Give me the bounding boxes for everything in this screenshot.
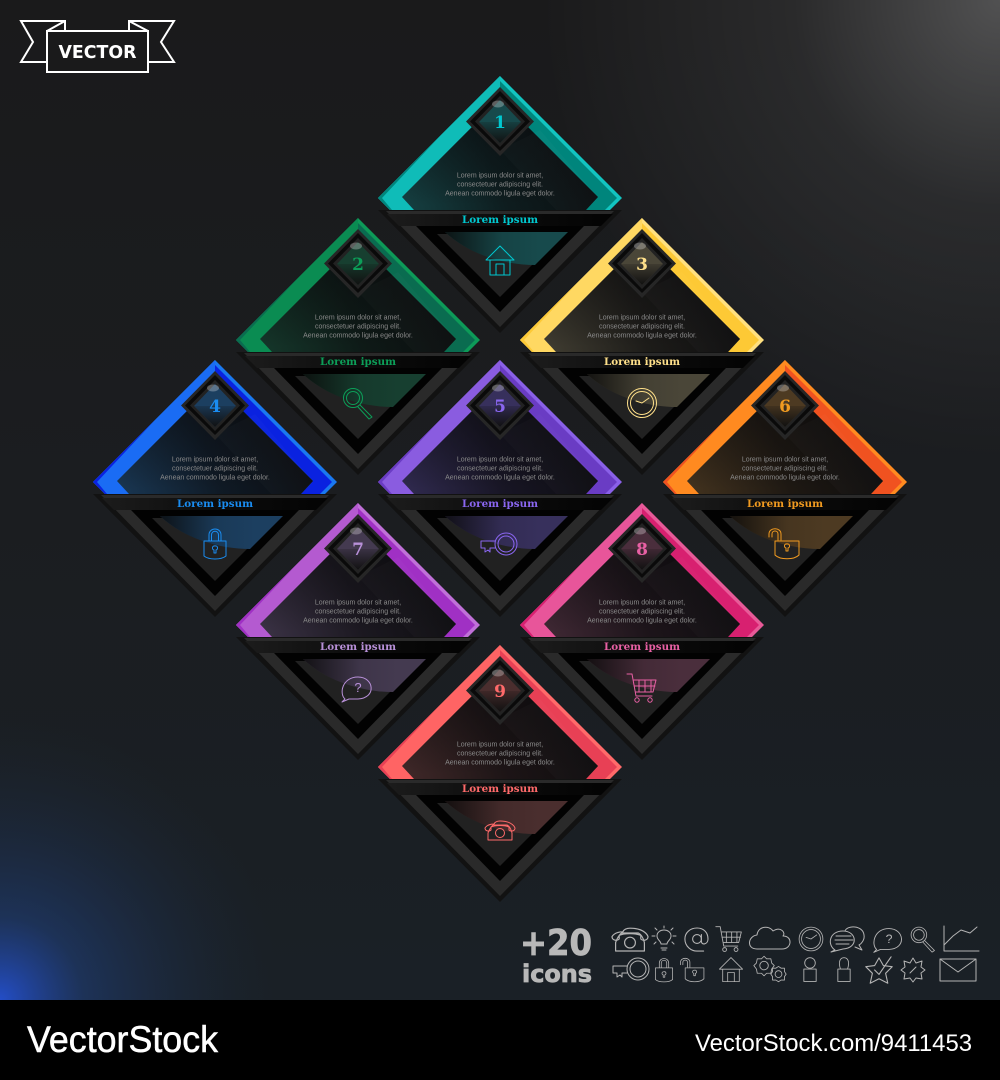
- icon: cart: [716, 927, 741, 951]
- icon: open padlock: [769, 529, 799, 559]
- module 7: purple: 7: [352, 540, 364, 560]
- icon: open padlock: [681, 958, 704, 982]
- module 1: teal: consectetuer adipiscing elit.: [457, 182, 543, 188]
- module 9: coral: Aenean commodo ligula eget dolor.: [445, 760, 555, 766]
- icon: line chart: [944, 926, 979, 951]
- module 3: yellow: Lorem ipsum: [604, 356, 680, 368]
- module 5: violet: Lorem ipsum dolor sit amet,: [457, 456, 543, 464]
- module 4: blue: [93, 360, 337, 617]
- module 4: blue: Lorem ipsum dolor sit amet,: [172, 456, 258, 464]
- module 6: orange: Lorem ipsum: [747, 498, 823, 510]
- module 7: purple: Lorem ipsum: [320, 641, 396, 653]
- footer band: VectorStock: [27, 1019, 218, 1060]
- module 3: yellow: 3: [636, 255, 648, 275]
- icon: envelope: [940, 959, 976, 981]
- icon: question: [874, 929, 901, 952]
- module 2: green: 2: [352, 255, 364, 275]
- icon: clock: [799, 927, 823, 951]
- icon: padlock: [655, 959, 673, 982]
- module 3: yellow: Lorem ipsum dolor sit amet,: [599, 314, 685, 322]
- module 2: green: Lorem ipsum: [320, 356, 396, 368]
- icon: magnifier: [911, 927, 934, 952]
- icon: question bubble: [342, 677, 371, 702]
- module 8: pink: Aenean commodo ligula eget dolor.: [587, 618, 697, 624]
- vector ribbon badge: [21, 21, 174, 72]
- icon: light bulb: [652, 926, 676, 950]
- icon: man: [804, 958, 816, 981]
- icon: star: [866, 957, 892, 983]
- footer band: [0, 1000, 1000, 1080]
- icon: question: ?: [886, 932, 893, 946]
- module 1: teal: Lorem ipsum: [462, 214, 538, 226]
- module 3: yellow: [520, 218, 764, 475]
- vector ribbon badge: VECTOR: [58, 42, 137, 63]
- module 1: teal: Aenean commodo ligula eget dolor.: [445, 190, 555, 198]
- module 7: purple: Aenean commodo ligula eget dolor.: [303, 618, 413, 624]
- module 2: green: consectetuer adipiscing elit.: [315, 324, 401, 330]
- module 1: teal: 1: [494, 113, 506, 133]
- module 5: violet: consectetuer adipiscing elit.: [457, 466, 543, 472]
- module 4: blue: consectetuer adipiscing elit.: [172, 466, 258, 472]
- module 8: pink: 8: [636, 540, 648, 560]
- module 9: coral: 9: [494, 682, 506, 702]
- module 6: orange: [663, 360, 907, 617]
- module 6: orange: Aenean commodo ligula eget dolor.: [730, 474, 840, 482]
- icon: chat: [830, 927, 864, 952]
- module 7: purple: [236, 503, 480, 760]
- module 5: violet: [378, 360, 622, 617]
- icon: telephone: [612, 928, 648, 951]
- icon: woman: [838, 958, 850, 981]
- icon: key: [481, 533, 517, 555]
- icon: house: [486, 246, 514, 275]
- module 7: purple: consectetuer adipiscing elit.: [315, 608, 401, 616]
- module 4: blue: Lorem ipsum: [177, 498, 253, 510]
- module 3: yellow: Aenean commodo ligula eget dolor.: [587, 332, 697, 340]
- icon: gears: [754, 956, 786, 982]
- module 2: green: [236, 218, 480, 475]
- icon: clock: [628, 388, 656, 418]
- module 8: pink: Lorem ipsum dolor sit amet,: [599, 600, 685, 606]
- module 8: pink: consectetuer adipiscing elit.: [599, 608, 685, 616]
- module 2: green: Lorem ipsum dolor sit amet,: [315, 314, 401, 322]
- +20 icons caption: +20: [520, 923, 592, 964]
- icon: at sign: [685, 928, 708, 951]
- module 6: orange: consectetuer adipiscing elit.: [742, 466, 828, 472]
- module 7: purple: Lorem ipsum dolor sit amet,: [315, 600, 401, 606]
- module 2: green: Aenean commodo ligula eget dolor.: [303, 332, 413, 340]
- +20 icons caption: icons: [522, 960, 592, 988]
- icon: cloud: [749, 927, 790, 949]
- module 9: coral: consectetuer adipiscing elit.: [457, 750, 543, 758]
- +20 icons caption: [520, 923, 592, 988]
- module 5: violet: 5: [494, 397, 506, 417]
- module 6: orange: Lorem ipsum dolor sit amet,: [742, 456, 828, 464]
- module 4: blue: 4: [209, 397, 221, 417]
- module 8: pink: [520, 503, 764, 760]
- module 5: violet: Lorem ipsum: [462, 498, 538, 510]
- icon set: [612, 926, 979, 983]
- icon: padlock: [204, 529, 226, 559]
- icon: key: [613, 958, 649, 980]
- icon: house: [719, 958, 743, 982]
- icon: telephone: [485, 821, 515, 840]
- module 9: coral: Lorem ipsum: [462, 783, 538, 795]
- module 1: teal: Lorem ipsum dolor sit amet,: [457, 172, 543, 180]
- module 9: coral: Lorem ipsum dolor sit amet,: [457, 742, 543, 748]
- footer band: VectorStock.com/9411453: [695, 1030, 972, 1057]
- icon: shopping cart: [627, 674, 656, 702]
- icon: magnifier: [344, 388, 372, 419]
- module 4: blue: Aenean commodo ligula eget dolor.: [160, 474, 270, 482]
- module 5: violet: Aenean commodo ligula eget dolor.: [445, 474, 555, 482]
- icon: discount burst: [901, 958, 925, 982]
- module 9: coral: [378, 645, 622, 902]
- module 8: pink: Lorem ipsum: [604, 641, 680, 653]
- icon: question bubble: ?: [354, 680, 362, 695]
- module 6: orange: 6: [779, 397, 791, 417]
- module 3: yellow: consectetuer adipiscing elit.: [599, 324, 685, 330]
- module 1: teal: [378, 76, 622, 333]
